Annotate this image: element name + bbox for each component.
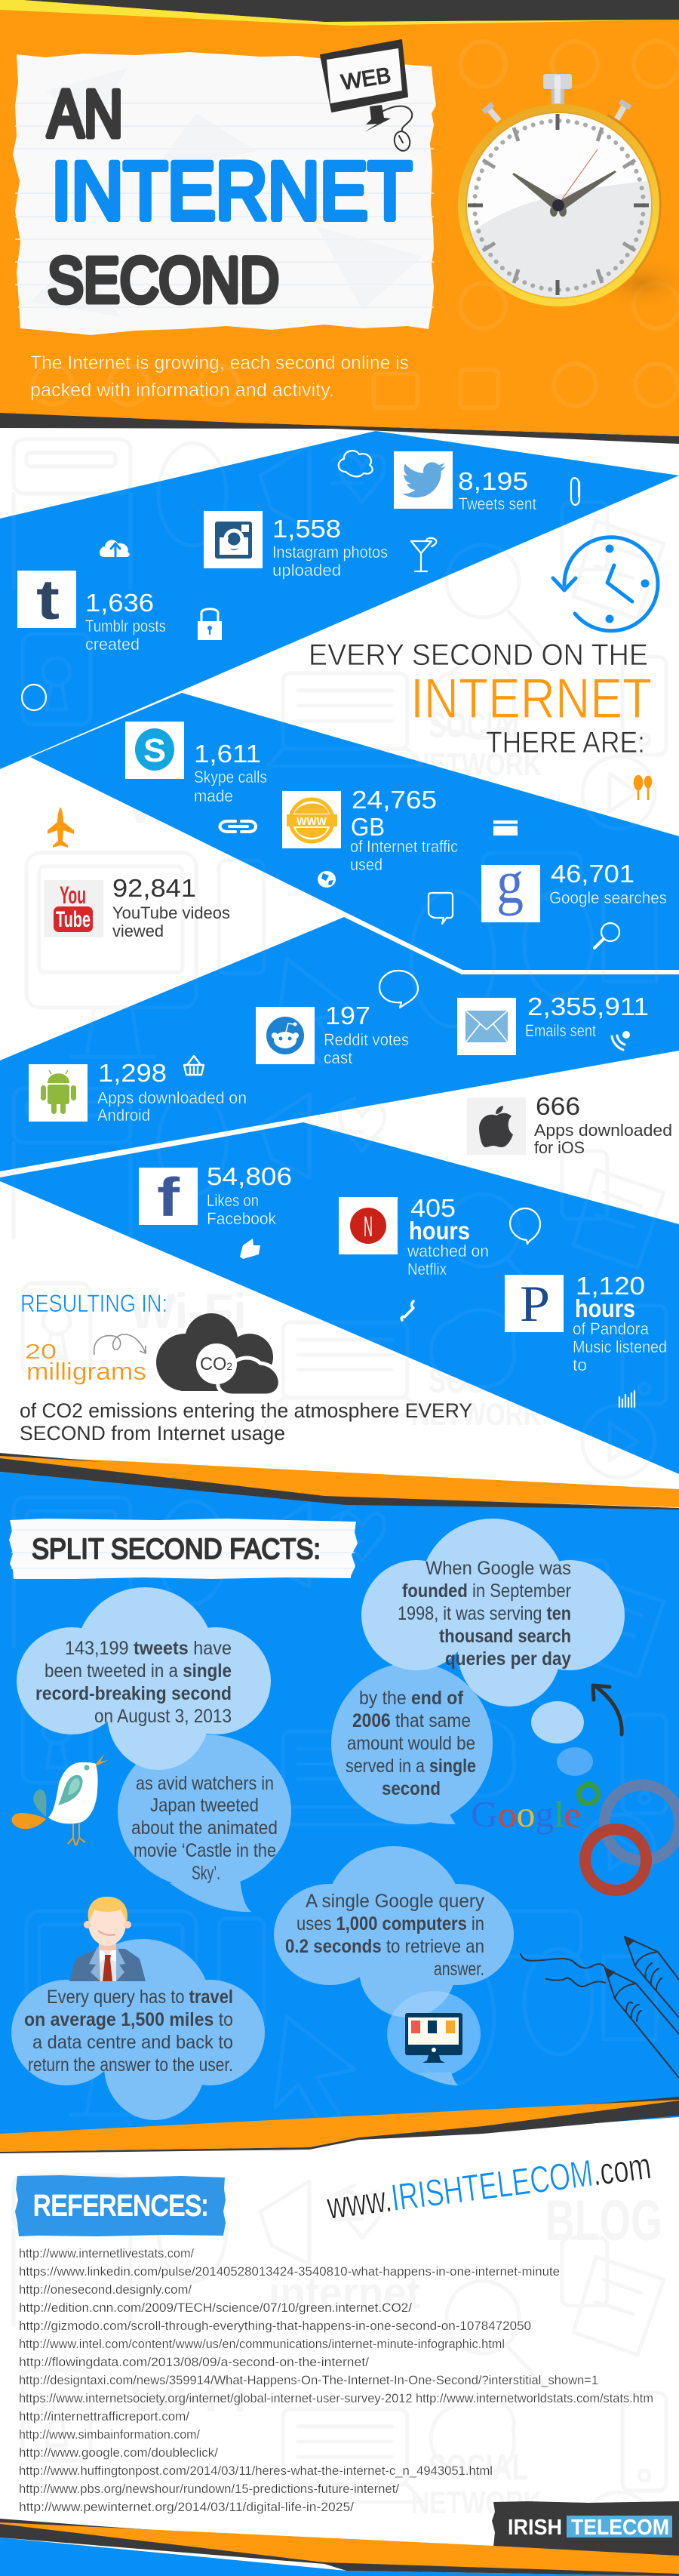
cloud: Google founded fact — [361, 1519, 625, 1707]
references list: http://flowingdata.com/2013/08/09/a-second-on-the-internet/ — [19, 2355, 369, 2369]
icon: wrench — [401, 1301, 413, 1320]
card: Netflix, 405 hours: hours — [409, 1217, 470, 1245]
card: traffic, 24,765 GB: of Internet traffic — [350, 837, 458, 856]
card: Skype, 1,611 calls: made — [194, 786, 233, 805]
card: Netflix, 405 hours: 405 — [410, 1194, 456, 1222]
icon: paperclip — [571, 478, 579, 505]
thought bubbles — [531, 1701, 593, 1776]
cloud: end of 2006 fact: amount would be — [347, 1733, 475, 1754]
card: Instagram, 1,558 photos: uploaded — [272, 561, 341, 580]
clock icon with return arrow — [553, 537, 658, 631]
faint doodle words: SOCIAL — [429, 706, 528, 746]
icon: thumbs up — [240, 1239, 260, 1259]
card: Facebook, 54,806 likes: 54,806 — [207, 1162, 292, 1190]
cloud: end of 2006 fact: served in a single — [346, 1756, 476, 1777]
card: Netflix, 405 hours: watched on — [407, 1242, 489, 1260]
icon: fork and spoon, orange — [634, 776, 651, 800]
references list: http://www.intel.com/content/www/us/en/communications/internet-minute-infographic.html — [19, 2337, 505, 2351]
card: Instagram, 1,558 photos — [204, 511, 388, 580]
intro text: packed with information and activity. — [30, 380, 334, 401]
cloud: query travel fact: on average 1,500 miles to — [24, 2009, 233, 2030]
icon: equalizer bars — [619, 1391, 634, 1407]
Irish Telecom logo — [492, 2501, 679, 2557]
icon: web monitor doodle — [321, 39, 412, 152]
divider band below facts — [0, 2097, 679, 2153]
card: Netflix, 405 hours: Netflix — [407, 1260, 447, 1279]
card: Apple, 666 apps: Apps downloaded — [534, 1121, 672, 1140]
faint doodle background, white areas — [14, 439, 666, 1713]
card: Skype, 1,611 calls: 1,611 — [194, 740, 261, 768]
references list: http://www.huffingtonpost.com/2014/03/11/heres-what-the-internet-c_n_4943051.html — [19, 2464, 493, 2478]
card: Apple, 666 apps — [467, 1092, 672, 1157]
cloud: query travel fact: Every query has to travel — [47, 1987, 233, 2008]
card: Skype, 1,611 calls: Skype calls — [194, 768, 267, 786]
card: Android, 1,298 apps — [29, 1059, 247, 1125]
title: INTERNET: INTERNET — [51, 145, 412, 236]
references list: http://www.simbainformation.com/ — [19, 2427, 200, 2442]
faint doodle words, references: Wi-Fi — [130, 2372, 247, 2421]
card: Reddit, 197 votes: Reddit votes — [324, 1030, 409, 1049]
cloud: end of 2006 fact: second — [382, 1778, 441, 1799]
cloud: Google founded fact: queries per day — [445, 1648, 571, 1670]
co2 amount callout: 20 — [25, 1340, 57, 1363]
card: Facebook, 54,806 likes: Facebook — [207, 1209, 277, 1228]
paper label: split second facts: SPLIT SECOND FACTS: — [32, 1534, 321, 1565]
resulting in heading: RESULTING IN: — [20, 1290, 167, 1317]
card: Pandora, 1,120 hours: hours — [575, 1294, 635, 1322]
card: YouTube, 92,841 videos: viewed — [112, 922, 164, 940]
faint doodle words, references: internet — [269, 2269, 420, 2318]
references list: http://designtaxi.com/news/359914/What-Happens-On-The-Internet-In-One-Second/?interstitial_shown=1 — [19, 2373, 598, 2387]
card: Tumblr, 1,636 posts: t — [36, 568, 60, 631]
title: SECOND: SECOND — [48, 245, 279, 315]
co2 description — [20, 1399, 472, 1445]
references list: https://www.linkedin.com/pulse/20140528013424-3540810-what-happens-in-one-internet-minute — [19, 2264, 560, 2279]
Google logo with rings: Google — [471, 1793, 581, 1835]
card: Facebook, 54,806 likes — [139, 1162, 292, 1228]
card: Tumblr, 1,636 posts: Tumblr posts — [85, 617, 166, 636]
card: Reddit, 197 votes — [256, 1002, 409, 1067]
heading: every second on the internet there are: THERE ARE: — [486, 726, 645, 759]
card: Tumblr, 1,636 posts: created — [85, 635, 140, 654]
stopwatch clock — [458, 74, 670, 306]
card: Android, 1,298 apps: 1,298 — [98, 1059, 167, 1087]
references list: http://www.pbs.org/newshour/rundown/15-predictions-future-internet/ — [19, 2482, 399, 2496]
Irish Telecom logo: IRISH — [508, 2516, 562, 2540]
arrow — [593, 1685, 622, 1734]
divider band above facts — [0, 1453, 679, 1510]
card: Google, 46,701 searches: 46,701 — [551, 860, 634, 888]
icon: wifi signal — [612, 1031, 630, 1050]
cloud: single Google query fact: uses 1,000 computers in — [296, 1913, 484, 1934]
cloud: tweets fact: on August 3, 2013 — [94, 1706, 232, 1727]
card: Pandora, 1,120 hours: 1,120 — [576, 1272, 645, 1300]
icon: martini — [411, 538, 436, 571]
card: Pandora, 1,120 hours: of Pandora — [573, 1319, 650, 1338]
card: Pandora, 1,120 hours: P — [520, 1275, 550, 1332]
cloud: Castle in the Sky fact: movie ‘Castle in the — [134, 1840, 276, 1861]
cloud: end of 2006 fact: by the end of — [359, 1688, 464, 1709]
card: Netflix, 405 hours: N — [364, 1211, 373, 1243]
faint doodle words: NETWORK — [411, 746, 542, 782]
faint doodle words, references: NETWORK — [411, 2485, 542, 2520]
card: Reddit, 197 votes: cast — [324, 1048, 352, 1067]
faint doodle words — [129, 706, 542, 1432]
card: Email, 2,355,911 sent: 2,355,911 — [527, 993, 649, 1020]
card: YouTube, 92,841 videos: 92,841 — [112, 874, 196, 902]
card: Pandora, 1,120 hours: to — [573, 1356, 587, 1374]
faint doodle background, references — [14, 2175, 666, 2565]
card: Facebook, 54,806 likes: Likes on — [207, 1191, 259, 1210]
facts section blue background — [0, 1472, 679, 2153]
references list — [19, 2246, 653, 2514]
cloud: end of 2006 fact — [331, 1663, 493, 1824]
card: Email, 2,355,911 sent — [457, 993, 649, 1055]
references list: http://www.pewinternet.org/2014/03/11/digital-life-in-2025/ — [19, 2500, 354, 2514]
cloud: Castle in the Sky fact — [118, 1734, 291, 1912]
faint doodle words, references: SOCIAL — [429, 2448, 528, 2488]
references list: http://edition.cnn.com/2009/TECH/science/07/10/green.internet.CO2/ — [19, 2301, 412, 2315]
card: YouTube, 92,841 videos: You — [60, 882, 86, 909]
bottom band — [0, 2519, 679, 2576]
card: Twitter, 8,195 tweets: 8,195 — [458, 467, 528, 495]
icon: magnifier — [595, 923, 619, 948]
icon: oval speech bubble — [510, 1208, 540, 1244]
cloud: query travel fact — [11, 1939, 265, 2120]
icon: payment card — [493, 820, 518, 836]
Irish Telecom logo: TELECOM — [571, 2516, 669, 2540]
card: Pandora, 1,120 hours: Music listened — [573, 1337, 667, 1356]
co2 description: of CO2 emissions entering the atmosphere EVERY — [20, 1399, 472, 1422]
card: Google, 46,701 searches — [481, 848, 667, 922]
card: traffic, 24,765 GB: 24,765 — [352, 786, 437, 814]
card: Google, 46,701 searches: Google searches — [549, 888, 667, 907]
card: traffic, 24,765 GB: GB — [351, 813, 385, 841]
cloud: Castle in the Sky fact: Sky’. — [192, 1863, 220, 1884]
card: Pandora, 1,120 hours — [505, 1272, 667, 1374]
references list: https://www.internetsociety.org/internet/global-internet-user-survey-2012 http://www.internetworldstats.com/stats.htm — [19, 2391, 653, 2405]
card: Netflix, 405 hours — [339, 1194, 489, 1279]
references label — [15, 2175, 226, 2236]
cloud: query travel fact: return the answer to the user. — [28, 2054, 233, 2076]
card: Reddit, 197 votes: 197 — [325, 1002, 370, 1029]
cloud: Castle in the Sky fact: about the animated — [131, 1817, 278, 1839]
paper label: split second facts — [9, 1519, 358, 1579]
card: Android, 1,298 apps: Android — [97, 1106, 150, 1125]
icon: round speech bubble — [379, 971, 418, 1008]
heading: every second on the internet there are — [309, 639, 652, 759]
cloud: query travel fact: a data centre and back to — [32, 2032, 233, 2053]
icon: upload cloud — [100, 540, 130, 557]
intro text: The Internet is growing, each second online is — [30, 352, 409, 374]
card: Google, 46,701 searches: g — [496, 848, 524, 916]
references list: http://www.internetlivestats.com/ — [19, 2246, 194, 2261]
card: traffic, 24,765 GB: WWW — [296, 815, 327, 828]
card: Skype, 1,611 calls: S — [143, 732, 166, 769]
card: Skype, 1,611 calls — [125, 722, 267, 805]
icon: speech bubble — [429, 893, 453, 924]
curly arrow — [94, 1334, 146, 1355]
title: AN: AN — [48, 76, 123, 151]
card: Tumblr, 1,636 posts: 1,636 — [85, 589, 154, 617]
header background — [0, 0, 679, 445]
icon: chain link — [220, 821, 256, 832]
faint doodle words: SOCIAL — [429, 1361, 528, 1401]
cloud: Castle in the Sky fact: Japan tweeted — [150, 1795, 259, 1816]
cloud: single Google query fact: 0.2 seconds to retrieve an — [285, 1936, 484, 1957]
card: Twitter, 8,195 tweets: Tweets sent — [459, 494, 536, 513]
card: YouTube, 92,841 videos: YouTube videos — [112, 903, 230, 922]
faint doodle words, references — [130, 2189, 662, 2520]
torn paper title panel — [13, 52, 436, 335]
co2 description: SECOND from Internet usage — [20, 1422, 285, 1445]
card: Instagram, 1,558 photos: Instagram photos — [272, 543, 388, 562]
heading: every second on the internet there are: EVERY SECOND ON THE — [309, 639, 648, 672]
cloud: single Google query fact — [274, 1846, 514, 2017]
cloud: tweets fact — [17, 1587, 271, 1770]
cloud: Google founded fact: When Google was — [426, 1558, 571, 1579]
icon: CO2 cloud — [156, 1313, 280, 1396]
card: traffic, 24,765 GB: used — [350, 855, 383, 874]
card: Twitter, 8,195 tweets — [394, 451, 536, 513]
references list: http://www.google.com/doubleclick/ — [19, 2445, 218, 2460]
card: Tumblr, 1,636 posts — [17, 568, 166, 654]
cloud: Google founded fact: thousand search — [439, 1626, 571, 1647]
card: Instagram, 1,558 photos: 1,558 — [272, 515, 341, 543]
cloud: end of 2006 fact: 2006 that same — [352, 1710, 471, 1731]
small decorative icons on panels — [22, 451, 634, 1407]
faint doodle words: NETWORK — [411, 1396, 542, 1432]
icon: CO2 cloud: CO2 — [200, 1354, 232, 1374]
references list: http://onesecond.designly.com/ — [19, 2282, 192, 2297]
references label: REFERENCES: — [33, 2190, 208, 2222]
cloud: single Google query fact: A single Google query — [306, 1891, 484, 1912]
card: YouTube, 92,841 videos: Tube — [56, 907, 91, 932]
co2 amount callout: milligrams — [26, 1358, 146, 1385]
icon: basket — [184, 1056, 204, 1075]
pencils and squiggles — [521, 1937, 679, 2078]
card: traffic, 24,765 GB — [282, 786, 458, 874]
icon: globe — [318, 871, 336, 888]
card: Apple, 666 apps: 666 — [536, 1092, 580, 1120]
intro text — [30, 352, 409, 401]
cloud: Castle in the Sky fact: as avid watchers in — [136, 1773, 274, 1794]
card: Apple, 666 apps: for iOS — [534, 1138, 585, 1157]
header bottom band — [0, 413, 679, 1514]
cloud: Google founded fact: founded in September — [402, 1580, 571, 1602]
monitor bubble — [387, 1991, 481, 2085]
icon: lock — [198, 609, 222, 640]
references list: http://internettrafficreport.com/ — [19, 2409, 189, 2424]
references list: http://gizmodo.com/scroll-through-everything-that-happens-in-one-second-on-1078472050 — [19, 2319, 531, 2333]
cloud: tweets fact: been tweeted in a single — [45, 1660, 232, 1682]
icon: businessman — [69, 1897, 146, 1981]
icon: airplane, orange — [48, 807, 74, 848]
faint doodle words: Wi-Fi — [130, 1283, 247, 1339]
cloud: single Google query fact: answer. — [434, 1959, 484, 1980]
cloud: tweets fact: 143,199 tweets have — [65, 1638, 232, 1659]
faint doodle overlay on blue panels — [14, 439, 666, 1478]
website address: www.IRISHTELECOM.com — [324, 2144, 653, 2227]
Google logo with rings — [471, 1784, 679, 1890]
cloud: tweets fact: record-breaking second — [35, 1683, 232, 1704]
icon: white bird — [12, 1753, 108, 1845]
blue diagonal panels — [0, 431, 679, 1474]
co2 amount callout — [25, 1340, 146, 1385]
faint doodle words: www — [129, 788, 251, 832]
icon: circle outline — [22, 685, 46, 710]
card: Android, 1,298 apps: Apps downloaded on — [97, 1088, 247, 1107]
card: YouTube, 92,841 videos — [44, 874, 230, 940]
icon: web monitor doodle: WEB — [340, 63, 392, 95]
card: Facebook, 54,806 likes: f — [157, 1168, 180, 1228]
cloud: Google founded fact: 1998, it was serving ten — [398, 1603, 571, 1624]
icon: cloud outline — [339, 451, 373, 476]
card: Email, 2,355,911 sent: Emails sent — [525, 1021, 596, 1040]
